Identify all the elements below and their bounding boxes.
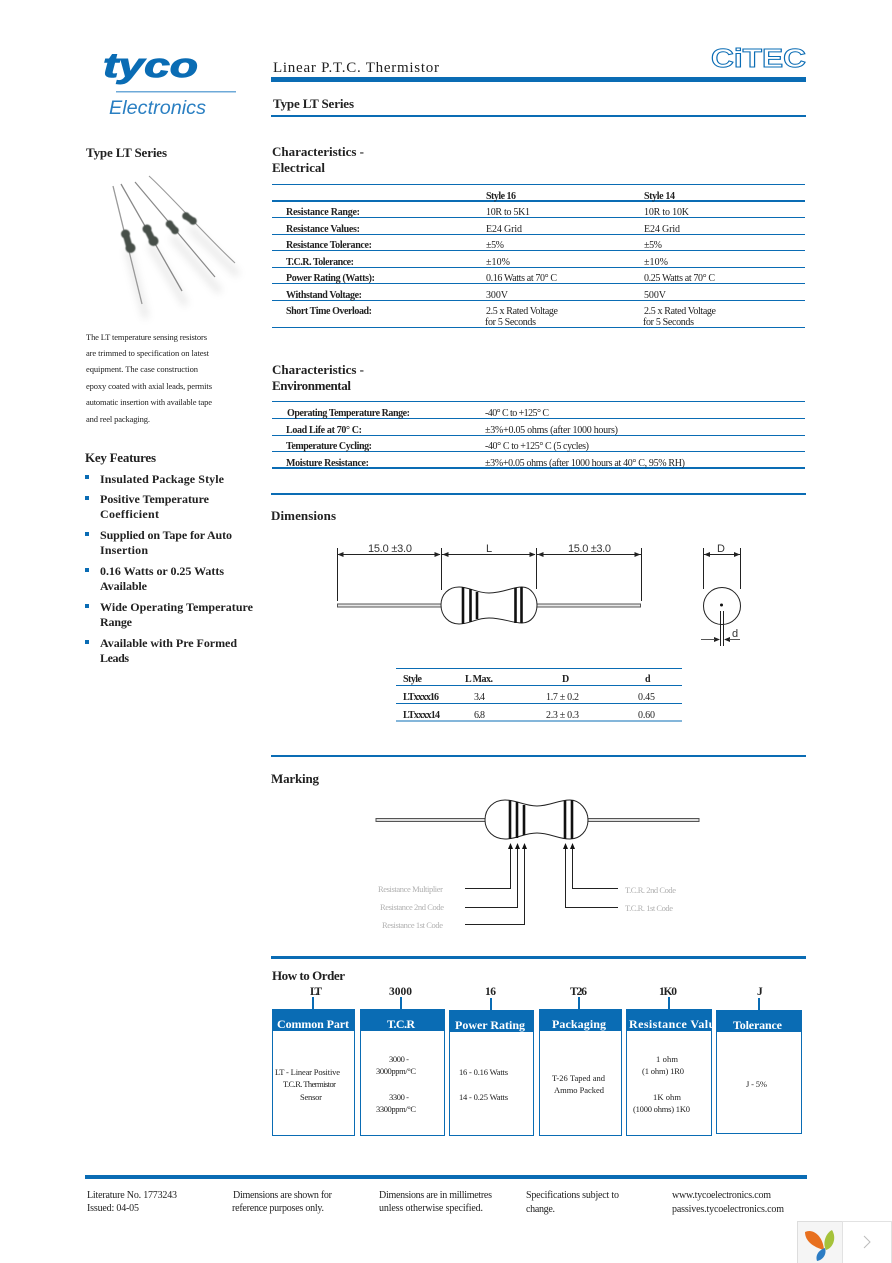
order code: Resistance Value: 1K ohm <box>653 1092 681 1102</box>
heading: Characteristics - Environmental <box>272 362 364 393</box>
table: electrical characteristics: T.C.R. Tolerance: <box>286 257 354 268</box>
order code: Power Rating <box>449 986 534 1136</box>
table: environmental characteristics: Moisture Resistance: <box>286 458 369 469</box>
order code: T.C.R: 3300ppm/°C <box>376 1104 416 1114</box>
heading: Characteristics - Electrical <box>272 144 364 175</box>
table: dimensions by style: d <box>645 674 651 685</box>
table: electrical characteristics: Style 14 <box>644 191 675 202</box>
table: electrical characteristics: Style 16 <box>486 191 516 202</box>
table: dimensions by style: 6.8 <box>474 710 485 721</box>
table: electrical characteristics: Resistance Values: <box>286 224 360 235</box>
heading: Characteristics - Environmental: Characteristics - <box>272 362 364 377</box>
order code: Packaging: Ammo Packed <box>554 1085 605 1095</box>
heading: Dimensions: Dimensions <box>271 508 336 523</box>
footer text: reference purposes only. <box>232 1203 324 1214</box>
band labels: T.C.R. 2nd Code <box>625 885 676 895</box>
band labels: Resistance 1st Code <box>382 920 443 930</box>
order code: Tolerance: Tolerance <box>733 1018 783 1032</box>
table: electrical characteristics: 10R to 5K1 <box>486 207 530 218</box>
table: electrical characteristics: 300V <box>486 290 509 301</box>
footer text: Dimensions are in millimetres <box>379 1190 492 1201</box>
list: key features: 0.16 Watts or 0.25 Watts <box>100 564 224 578</box>
paragraph: description <box>86 332 212 424</box>
heading: How to Order: How to Order <box>272 968 345 983</box>
table: dimensions by style <box>396 668 682 721</box>
band labels <box>378 884 676 930</box>
table: electrical characteristics: for 5 Seconds <box>643 317 694 328</box>
header bar <box>271 77 806 82</box>
heading: Characteristics - Electrical: Electrical <box>272 160 325 175</box>
footer text: passives.tycoelectronics.com <box>672 1204 784 1215</box>
table: electrical characteristics: E24 Grid <box>644 224 680 235</box>
footer text: www.tycoelectronics.com <box>672 1190 771 1201</box>
diagram: thermistor side view with dimensions <box>338 543 642 624</box>
order code: Packaging: T-26 Taped and <box>552 1073 606 1083</box>
table: electrical characteristics: Resistance Tolerance: <box>286 240 372 251</box>
band labels: Resistance 2nd Code <box>380 902 444 912</box>
order code: Packaging <box>539 986 622 1136</box>
order code: Tolerance: J - 5% <box>746 1079 767 1089</box>
diagram: thermistor end view with dimensions <box>701 543 740 646</box>
diagram: colour band marking <box>376 800 699 930</box>
logo: tyco Electronics: tyco <box>103 47 198 85</box>
order code: Resistance Value: (1000 ohms) 1K0 <box>633 1104 690 1114</box>
list: key features: Available with Pre Formed <box>100 636 237 650</box>
table: electrical characteristics: ±5% <box>644 240 662 251</box>
table: electrical characteristics: Resistance Range: <box>286 207 360 218</box>
table: electrical characteristics: E24 Grid <box>486 224 522 235</box>
sidebar heading: Type LT Series: Type LT Series <box>86 145 167 160</box>
section rule <box>271 956 806 959</box>
product photo: four thermistors <box>113 176 238 318</box>
order code: Resistance Value <box>626 986 722 1136</box>
table: dimensions by style: D <box>562 674 569 685</box>
order code: Resistance Value: 1K0 <box>659 986 677 998</box>
order code: Packaging: Packaging <box>552 1017 606 1031</box>
band labels: Resistance Multiplier <box>378 884 443 894</box>
diagram: thermistor side view with dimensions: 15.0 ±3.0 <box>368 543 412 555</box>
table: environmental characteristics: ±3%+0.05 ohms (after 1000 hours at 40° C, 95% RH) <box>485 458 685 469</box>
heading: Key Features: Key Features <box>85 450 156 465</box>
footer text: change. <box>526 1204 555 1215</box>
footer text: Dimensions are shown for <box>233 1190 333 1201</box>
list: key features: Wide Operating Temperature <box>100 600 254 614</box>
list: key features: Supplied on Tape for Auto <box>100 528 232 542</box>
list: key features: Positive Temperature <box>100 492 210 506</box>
paragraph: description: and reel packaging. <box>86 414 150 424</box>
table: electrical characteristics: ±10% <box>644 257 668 268</box>
order code: Resistance Value: (1 ohm) 1R0 <box>642 1066 684 1076</box>
order code: T.C.R: T.C.R <box>387 1017 415 1031</box>
table: electrical characteristics <box>272 184 805 328</box>
table: environmental characteristics: Operating Temperature Range: <box>287 408 410 419</box>
table: electrical characteristics: 2.5 x Rated Voltage <box>644 306 717 317</box>
order code: T.C.R <box>360 986 445 1136</box>
footer text <box>87 1190 784 1215</box>
footer bar <box>85 1175 807 1179</box>
table: dimensions by style: 3.4 <box>474 692 485 703</box>
table: dimensions by style: 1.7 ± 0.2 <box>546 692 579 703</box>
order code: Common Part: T.C.R. Thermistor <box>283 1079 336 1089</box>
paragraph: description: The LT temperature sensing resistors <box>86 332 207 342</box>
table: dimensions by style: L Max. <box>465 674 494 685</box>
table: dimensions by style: LTxxxx14 <box>403 710 440 721</box>
order code: T.C.R: 3000ppm/°C <box>376 1066 416 1076</box>
section rule <box>271 493 806 495</box>
page title: Linear P.T.C. Thermistor: Linear P.T.C. Thermistor <box>273 60 439 76</box>
order code: T.C.R: 3000 <box>389 986 412 998</box>
table: electrical characteristics: ±10% <box>486 257 510 268</box>
order code: Resistance Value: 1 ohm <box>656 1054 678 1064</box>
table: electrical characteristics: Power Rating (Watts): <box>286 273 375 284</box>
table: electrical characteristics: 0.16 Watts at 70° C <box>486 273 557 284</box>
order code: Common Part <box>272 986 355 1136</box>
list: key features: Range <box>100 615 133 629</box>
table: dimensions by style: 0.45 <box>638 692 655 703</box>
table: environmental characteristics: -40° C to +125° C <box>485 408 549 419</box>
logo: C-TEC: CiTEC <box>711 43 806 73</box>
table: environmental characteristics: -40° C to +125° C (5 cycles) <box>485 441 589 452</box>
footer text: unless otherwise specified. <box>379 1203 483 1214</box>
table: electrical characteristics: Withstand Voltage: <box>286 290 362 301</box>
paragraph: description: automatic insertion with available tape <box>86 397 212 407</box>
paragraph: description: are trimmed to specification on latest <box>86 348 210 358</box>
order code: Common Part: Sensor <box>300 1092 322 1102</box>
footer text: Issued: 04-05 <box>87 1203 139 1214</box>
logo: tyco Electronics: Electronics <box>109 98 207 119</box>
list: key features: Available <box>100 579 148 593</box>
diagram: thermistor side view with dimensions: 15.0 ±3.0 <box>568 543 611 555</box>
logo: tyco Electronics <box>103 47 236 119</box>
section heading: Type LT Series: Type LT Series <box>273 96 354 111</box>
table: dimensions by style: Style <box>403 674 423 685</box>
heading: Marking: Marking <box>271 771 320 786</box>
footer text: Specifications subject to <box>526 1190 619 1201</box>
table: dimensions by style: LTxxxx16 <box>403 692 439 703</box>
section rule <box>271 755 806 757</box>
order code: Common Part: Common Part <box>277 1017 349 1031</box>
order code: Packaging: T26 <box>570 986 587 998</box>
order code: T.C.R: 3000 - <box>389 1054 409 1064</box>
table: electrical characteristics: 0.25 Watts at 70° C <box>644 273 715 284</box>
list: key features <box>85 472 254 665</box>
widget: leaf logo and next arrow <box>798 1222 892 1263</box>
order code: Common Part: LT - Linear Positive <box>275 1067 340 1077</box>
table: environmental characteristics: ±3%+0.05 ohms (after 1000 hours) <box>485 425 618 436</box>
list: key features: Coefficient <box>100 507 159 521</box>
table: environmental characteristics: Temperature Cycling: <box>286 441 372 452</box>
order code: Power Rating: Power Rating <box>455 1018 525 1032</box>
table: electrical characteristics: 500V <box>644 290 667 301</box>
order code: Resistance Value: Resistance Value <box>629 1017 722 1031</box>
table: dimensions by style: 2.3 ± 0.3 <box>546 710 579 721</box>
order code: Power Rating: 16 - 0.16 Watts <box>459 1067 508 1077</box>
list: key features: Leads <box>100 651 129 665</box>
footer text: Literature No. 1773243 <box>87 1190 177 1201</box>
table: electrical characteristics: for 5 Seconds <box>485 317 536 328</box>
arrows: band pointers <box>465 843 618 924</box>
table: electrical characteristics: 2.5 x Rated Voltage <box>486 306 559 317</box>
order code: Tolerance <box>716 986 802 1134</box>
order code: Common Part: LT <box>310 986 322 998</box>
order code: Tolerance: J <box>757 986 763 998</box>
table: dimensions by style: 0.60 <box>638 710 655 721</box>
heading: Characteristics - Electrical: Characteristics - <box>272 144 364 159</box>
diagram: thermistor side view with dimensions: L <box>486 543 492 555</box>
heading: Characteristics - Environmental: Environmental <box>272 378 351 393</box>
diagram: thermistor end view with dimensions: d <box>732 628 738 640</box>
order code: T.C.R: 3300 - <box>389 1092 409 1102</box>
table: environmental characteristics: Load Life at 70° C: <box>286 425 362 436</box>
list: key features: Insertion <box>100 543 148 557</box>
paragraph: description: epoxy coated with axial leads, permits <box>86 381 212 391</box>
table: electrical characteristics: ±5% <box>486 240 504 251</box>
diagram: thermistor end view with dimensions: D <box>717 543 725 555</box>
band labels: T.C.R. 1st Code <box>625 903 673 913</box>
list: key features: Insulated Package Style <box>100 472 225 486</box>
table: electrical characteristics: Short Time Overload: <box>286 306 372 317</box>
header rule <box>271 115 806 117</box>
table: electrical characteristics: 10R to 10K <box>644 207 690 218</box>
paragraph: description: equipment. The case construction <box>86 364 199 374</box>
order code: Power Rating: 16 <box>485 986 496 998</box>
table: environmental characteristics <box>272 402 805 469</box>
order code: Power Rating: 14 - 0.25 Watts <box>459 1092 508 1102</box>
